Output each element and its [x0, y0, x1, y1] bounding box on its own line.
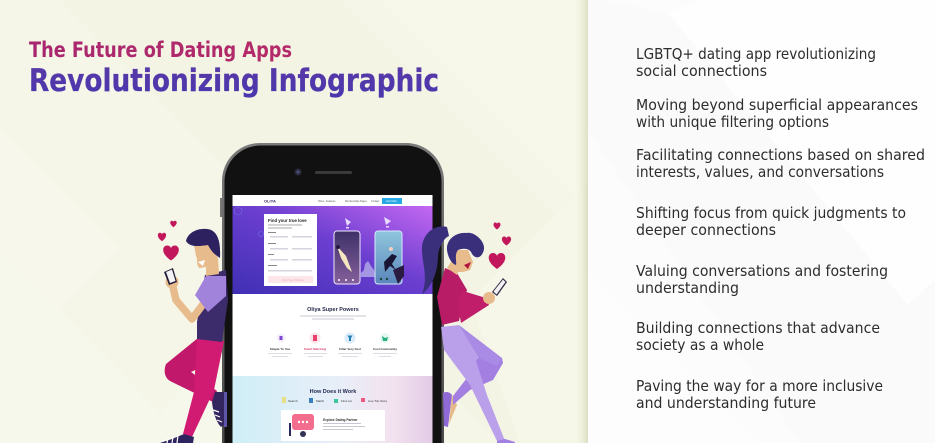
tabs [282, 397, 388, 403]
point 6: society as a whole [636, 336, 764, 354]
feature labels: Smart Matching [304, 347, 326, 351]
phone screen [232, 195, 432, 443]
woman front leg [441, 325, 515, 443]
text block: list of points [636, 45, 925, 412]
screen hero [232, 206, 432, 294]
heart small [494, 222, 500, 230]
feature labels: Cool Community [373, 347, 397, 351]
how it works card: Explore Dating Partner [323, 418, 358, 422]
heart medium [502, 236, 511, 246]
heart small [170, 221, 177, 227]
screen nav bar: Features [326, 200, 336, 203]
woman torso [437, 268, 467, 325]
point 2: Moving beyond superficial appearances [636, 96, 918, 114]
point 3: interests, values, and conversations [636, 163, 884, 181]
point 5: Valuing conversations and fostering [636, 262, 888, 280]
tabs: Match [316, 399, 325, 403]
feature labels [270, 347, 397, 351]
how does it work section [232, 376, 432, 443]
point 3: Facilitating connections based on shared [636, 146, 925, 164]
woman hair [447, 233, 484, 265]
title line 2: Revolutionizing Infographic [29, 63, 439, 99]
tabs: Live Trip Story [368, 399, 388, 403]
heart medium [158, 233, 166, 241]
man hair [186, 229, 220, 258]
title [29, 38, 439, 99]
point 7 [636, 377, 883, 412]
phone body [220, 143, 444, 443]
tabs: Find out [341, 399, 352, 403]
woman neck and face [447, 250, 473, 275]
point 7: and understanding future [636, 394, 816, 412]
search form card: Find your true love [268, 218, 307, 223]
man neck and face [194, 244, 219, 276]
illustration: man with phone [160, 229, 228, 443]
feature labels: Filter Very Fast [339, 347, 361, 351]
illustration: hearts right [489, 222, 511, 269]
point 3 [636, 146, 925, 181]
man back leg and shoe [165, 338, 227, 427]
heart large [163, 246, 179, 260]
phone mockup [220, 143, 444, 443]
tabs: Search [288, 399, 298, 403]
point 5: understanding [636, 279, 739, 297]
point 4: deeper connections [636, 221, 776, 239]
screen nav bar: Join Now [386, 199, 397, 203]
search form card [264, 214, 317, 286]
illustration: hearts left [158, 221, 179, 260]
how does it work section: How Does it Work [310, 389, 357, 395]
point 6 [636, 319, 880, 354]
point 4: Shifting focus from quick judgments to [636, 204, 906, 222]
point 1: LGBTQ+ dating app revolutionizing [636, 45, 876, 63]
illustration: woman with phone [422, 226, 515, 443]
title line 1: The Future of Dating Apps [29, 38, 292, 62]
point 7: Paving the way for a more inclusive [636, 377, 883, 395]
point 5 [636, 262, 888, 297]
point 2: with unique filtering options [636, 113, 829, 131]
screen nav bar: Contact [371, 200, 380, 203]
how it works card [281, 410, 385, 441]
man arm and hand [164, 268, 204, 319]
point 1: social connections [636, 62, 767, 80]
feature icons [276, 332, 390, 344]
point 6: Building connections that advance [636, 319, 880, 337]
woman hand and phone [483, 278, 507, 304]
background: cream diagonal panel [0, 0, 590, 443]
screen nav bar: OLIYA [264, 198, 276, 204]
man smile [198, 260, 205, 266]
screen nav bar [264, 198, 402, 204]
point 4 [636, 204, 906, 239]
man front leg and shoe [160, 338, 224, 443]
point 2 [636, 96, 918, 131]
woman smile [464, 262, 471, 269]
search form card: Find Your Partner [282, 278, 304, 282]
screen nav bar: Pages [360, 200, 368, 203]
point 1 [636, 45, 876, 80]
man torso [197, 270, 228, 342]
super powers section [268, 307, 397, 357]
screen nav bar: Memberships [345, 200, 360, 203]
hero skyline [360, 261, 375, 277]
hero phone right [375, 217, 404, 284]
woman back leg [443, 358, 503, 427]
feature labels: Simple To Use [270, 347, 291, 351]
screen nav bar: Home [318, 200, 325, 203]
woman ponytail [422, 226, 449, 294]
woman arm [457, 291, 489, 323]
super powers section: Oliya Super Powers [307, 307, 359, 313]
heart large [489, 253, 505, 269]
man sleeve [195, 276, 226, 312]
panel: right white list background [588, 0, 935, 443]
hero phone left [334, 218, 360, 284]
